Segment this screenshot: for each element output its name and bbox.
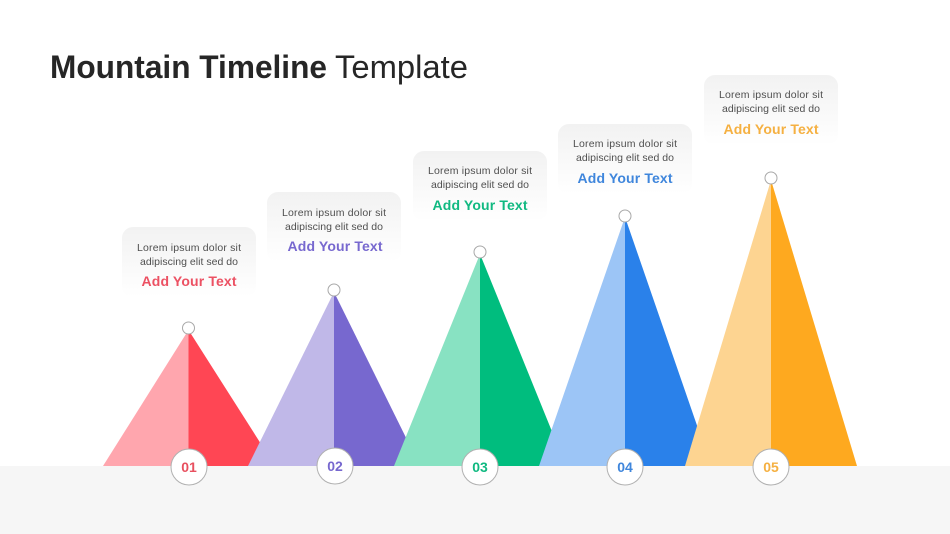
callout 04: Add Your Text bbox=[578, 170, 673, 186]
callout 02: adipiscing elit sed do bbox=[285, 221, 383, 233]
callout 05: Lorem ipsum dolor sit bbox=[719, 89, 823, 101]
number badge 01: 01 bbox=[181, 459, 197, 475]
number badge 02 bbox=[317, 448, 353, 484]
title: Template bbox=[335, 49, 468, 85]
title bbox=[50, 49, 468, 85]
number badge 03 bbox=[462, 449, 498, 485]
callout 01 bbox=[122, 227, 256, 297]
callout 05: adipiscing elit sed do bbox=[722, 103, 820, 115]
mountain 02 bbox=[248, 292, 420, 466]
peak marker 05 bbox=[765, 172, 777, 184]
peak marker 01 bbox=[182, 322, 194, 334]
callout 04 bbox=[558, 124, 692, 194]
callout 01: adipiscing elit sed do bbox=[140, 256, 238, 268]
mountain 04 bbox=[539, 217, 711, 466]
mountain 05 bbox=[685, 180, 857, 466]
callout 02 bbox=[267, 192, 401, 262]
callout 03 bbox=[413, 151, 547, 221]
callout 01: Add Your Text bbox=[142, 273, 237, 289]
callout 04: Lorem ipsum dolor sit bbox=[573, 138, 677, 150]
number badge 04: 04 bbox=[617, 459, 633, 475]
ground band bbox=[0, 466, 950, 534]
title: Mountain Timeline bbox=[50, 49, 327, 85]
number badge 05 bbox=[753, 449, 789, 485]
number badge 05: 05 bbox=[763, 459, 779, 475]
mountain 01 bbox=[103, 330, 275, 466]
callout 02: Add Your Text bbox=[288, 238, 383, 254]
callout 05 bbox=[704, 75, 838, 145]
peak marker 02 bbox=[328, 284, 340, 296]
callout 04: adipiscing elit sed do bbox=[576, 152, 674, 164]
number badge 03: 03 bbox=[472, 459, 488, 475]
callout 01: Lorem ipsum dolor sit bbox=[137, 242, 241, 254]
peak marker 04 bbox=[619, 210, 631, 222]
number badge 02: 02 bbox=[327, 458, 343, 474]
callout 03: Add Your Text bbox=[432, 197, 528, 213]
peak marker 03 bbox=[474, 246, 486, 258]
callout 02: Lorem ipsum dolor sit bbox=[282, 207, 386, 219]
callout 03: Lorem ipsum dolor sit bbox=[428, 165, 532, 177]
callout 03: adipiscing elit sed do bbox=[431, 179, 529, 191]
callout 05: Add Your Text bbox=[724, 121, 819, 137]
number badge 01 bbox=[171, 449, 207, 485]
number badge 04 bbox=[607, 449, 643, 485]
mountain 03 bbox=[394, 254, 566, 466]
